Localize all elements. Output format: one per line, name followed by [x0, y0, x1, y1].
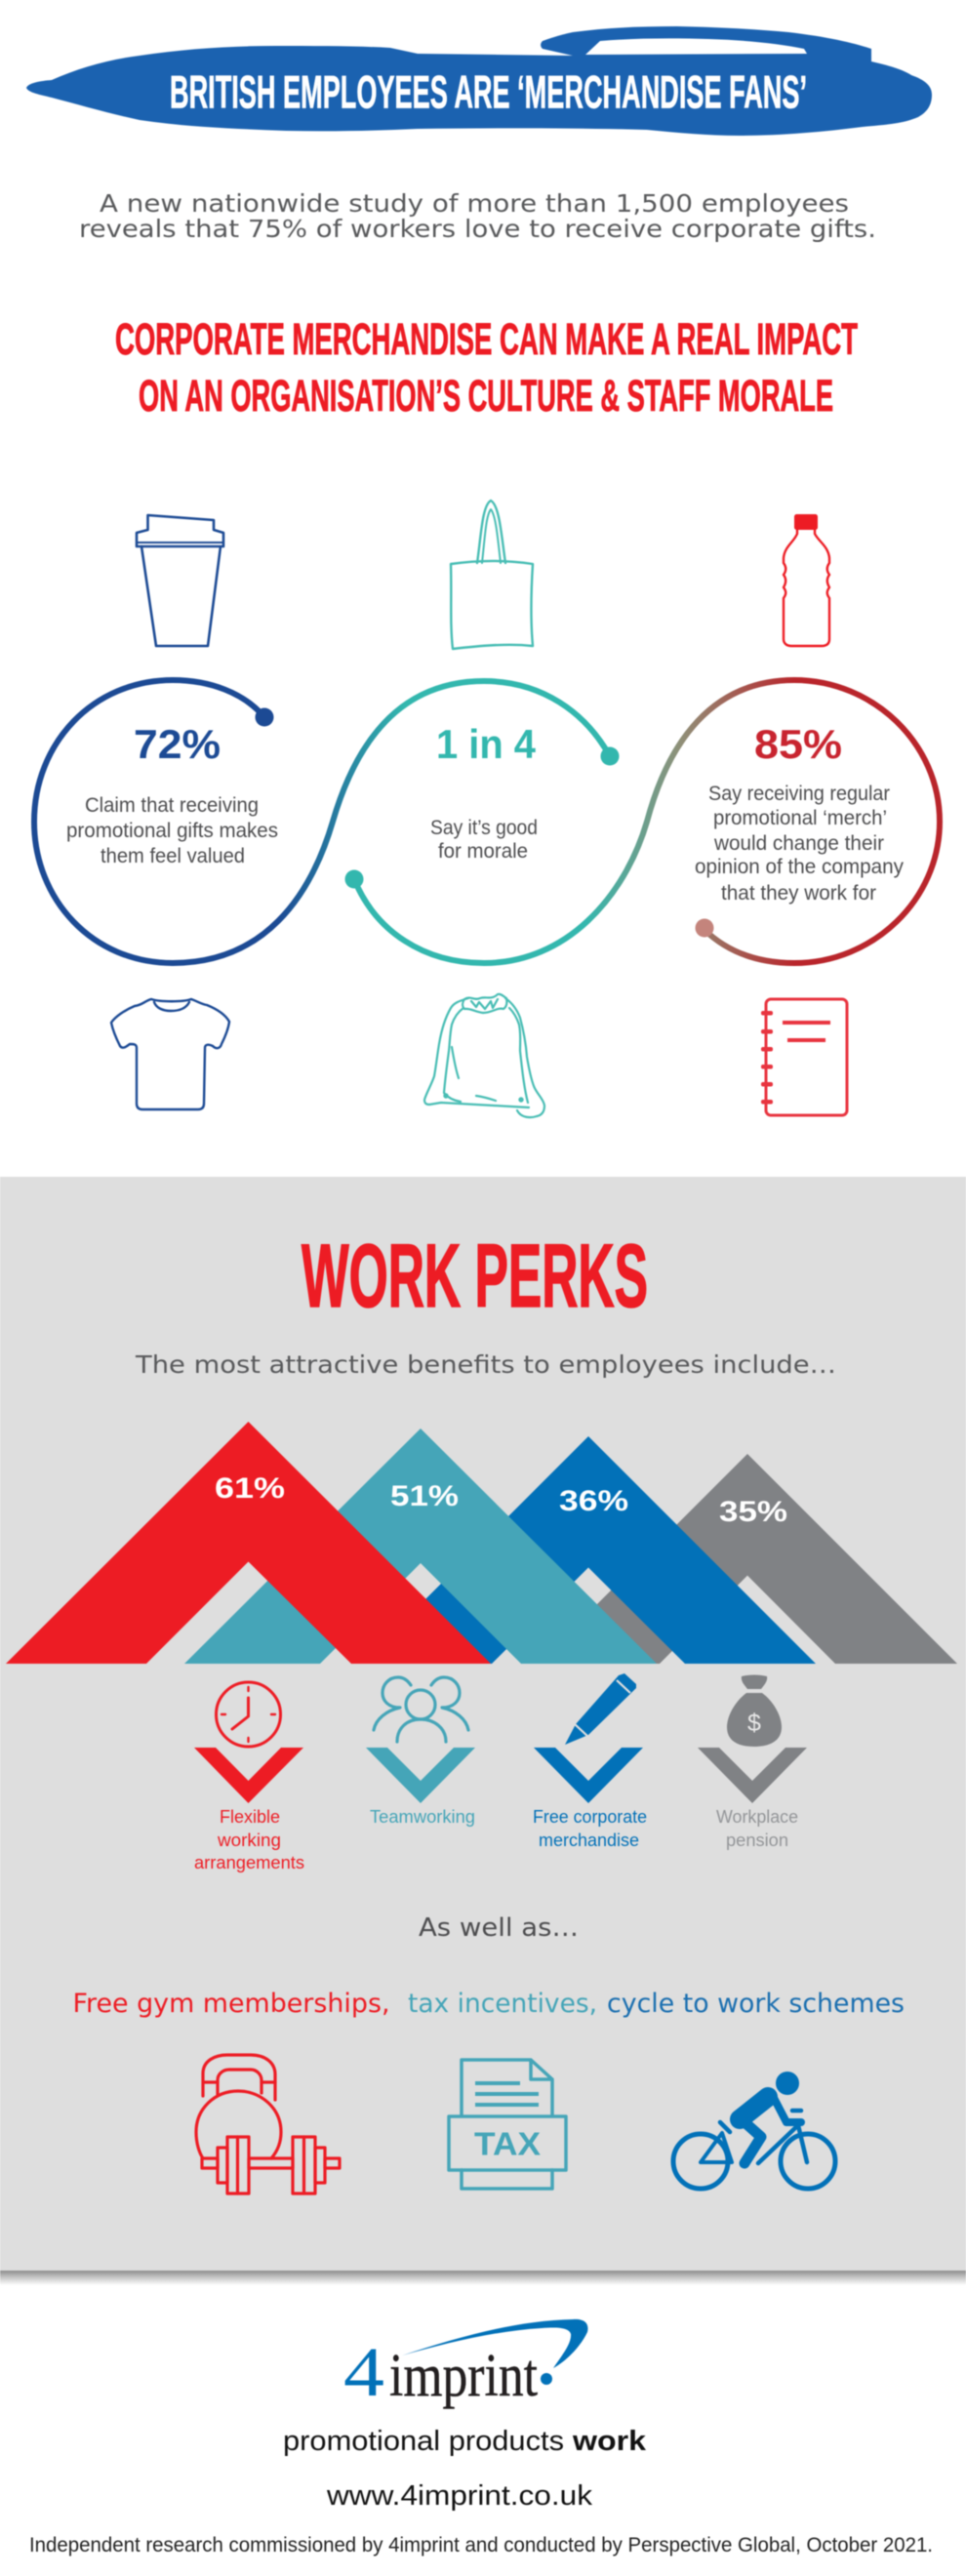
icon: tote bag [451, 501, 533, 649]
shadow edge [0, 2271, 966, 2285]
source note: Independent research commissioned by 4imprint and conducted by Perspective Global, October 2021. [29, 2534, 933, 2556]
icon: coffee cup [137, 515, 223, 646]
intro text: A new nationwide study of more than 1,500 employees [100, 189, 849, 218]
icon: money bag: $ [747, 1710, 761, 1737]
perk: free corporate merchandise: Free corporate [533, 1807, 647, 1827]
icon: tax document: TAX [474, 2125, 541, 2162]
icon: kettlebell and dumbbell [196, 2055, 340, 2194]
perk: free corporate merchandise: merchandise [539, 1831, 639, 1850]
stat: 85%: would change their [713, 831, 884, 855]
perk: workplace pension [698, 1674, 807, 1850]
stat: 1 in 4: Say it’s good [430, 816, 538, 839]
other benefits line: tax incentives, [408, 1989, 597, 2019]
icon: t-shirt [111, 999, 229, 1109]
stat: 85%: 85% [754, 721, 842, 767]
red heading [115, 314, 858, 421]
tagline: promotional products [283, 2426, 564, 2457]
stat: 1 in 4: 1 in 4 [436, 721, 537, 767]
footer logo: 4imprint: imprint [389, 2343, 538, 2409]
stat: 85%: Say receiving regular [708, 782, 890, 805]
other benefits line: cycle to work schemes [607, 1989, 905, 2019]
subheading: The most attractive benefits to employees include… [135, 1350, 836, 1379]
perk: teamworking: Teamworking [370, 1807, 475, 1827]
stat: 1 in 4: for morale [438, 839, 528, 863]
stat: 85%: that they work for [721, 881, 876, 905]
stat: 1 in 4 [430, 721, 538, 863]
footer logo: 4imprint: 4 [343, 2333, 384, 2411]
intro text: reveals that 75% of workers love to receive corporate gifts. [79, 215, 876, 243]
curve: blue to teal [34, 680, 610, 963]
intro text [79, 189, 876, 243]
perk: free corporate merchandise [533, 1673, 647, 1850]
other benefits line [72, 1989, 905, 2019]
website: www.4imprint.co.uk [326, 2480, 593, 2512]
heading: work perks: WORK PERKS [302, 1227, 648, 1326]
icon: team [374, 1677, 468, 1742]
icon: tax document [449, 2060, 566, 2189]
other benefits line: Free gym memberships, [72, 1989, 390, 2019]
icon: water bottle [784, 514, 829, 646]
stat: 72%: Claim that receiving [85, 793, 259, 817]
stat: 72%: them feel valued [101, 844, 245, 867]
perk: teamworking [366, 1677, 475, 1827]
perk: flexible working: working [217, 1831, 281, 1850]
stat: 85%: opinion of the company [695, 855, 904, 878]
as well as text: As well as… [419, 1913, 579, 1943]
perk: flexible working: Flexible [220, 1807, 280, 1827]
peak values: 36% [559, 1485, 628, 1517]
peak values: 51% [390, 1480, 459, 1512]
curve end dots [256, 708, 714, 937]
icon: notebook [761, 999, 847, 1115]
stat: 72%: 72% [134, 721, 221, 767]
s-curve stats [34, 680, 940, 963]
panel: work perks [0, 1177, 966, 2285]
perk: workplace pension: Workplace [716, 1807, 798, 1827]
chart: chevron peaks [6, 1422, 957, 1664]
swoosh [402, 2319, 587, 2368]
tagline: work [572, 2426, 647, 2457]
curve: teal to red [354, 680, 940, 963]
footer logo: 4imprint [343, 2319, 587, 2411]
stat: 72%: promotional gifts makes [66, 819, 278, 842]
perk: workplace pension: pension [726, 1831, 788, 1850]
icon: cyclist [673, 2072, 835, 2189]
icon: drawstring bag [424, 994, 544, 1117]
stat: 85% [695, 721, 904, 905]
peak values [215, 1472, 787, 1528]
stat: 72% [66, 721, 278, 867]
icon: pencil [565, 1673, 636, 1745]
perk: flexible working: arrangements [194, 1853, 304, 1872]
icon: clock [217, 1682, 281, 1747]
peak values: 35% [719, 1496, 787, 1528]
stat: 85%: promotional ‘merch’ [713, 806, 887, 829]
perk: flexible working [194, 1682, 304, 1872]
peak values: 61% [215, 1472, 285, 1505]
icon: money bag [727, 1674, 782, 1747]
header: pen banner [26, 26, 932, 136]
